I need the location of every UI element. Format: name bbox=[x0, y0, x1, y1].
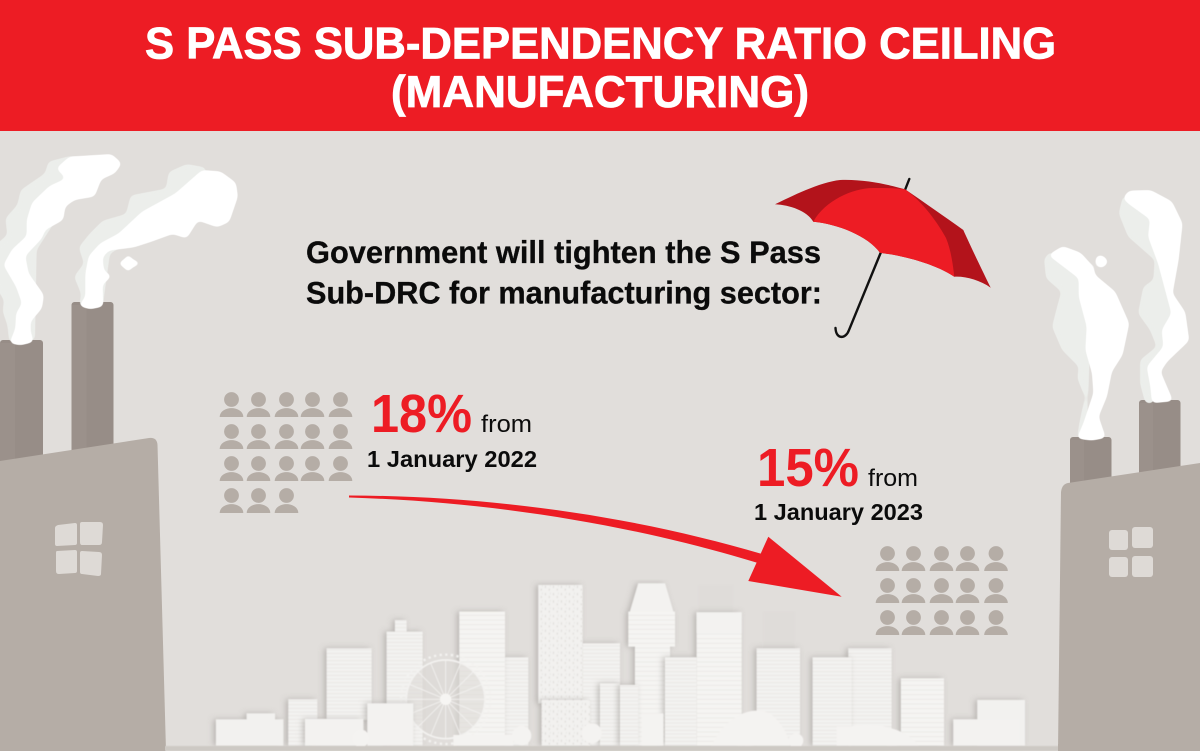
left building bbox=[0, 438, 166, 751]
left windows bbox=[55, 522, 103, 576]
right smoke bbox=[1044, 190, 1189, 441]
umbrella handle bbox=[836, 179, 909, 337]
skyline left half bbox=[216, 585, 620, 747]
trees bbox=[352, 723, 602, 747]
stat 2022: 1 January 2022 bbox=[367, 446, 537, 472]
title: S PASS SUB-DEPENDENCY RATIO CEILING bbox=[145, 20, 1056, 68]
header banner bbox=[0, 0, 1200, 131]
title: (MANUFACTURING) bbox=[391, 68, 809, 117]
stat 2023 bbox=[754, 438, 923, 525]
skyline right half bbox=[620, 583, 1025, 748]
right chimneys bbox=[1070, 400, 1180, 492]
left factory bbox=[0, 154, 238, 751]
umbrella canopy bright bbox=[813, 188, 954, 277]
stat 2023: 1 January 2023 bbox=[754, 499, 923, 525]
trees bbox=[642, 711, 918, 748]
left chimneys bbox=[0, 302, 114, 470]
stat 2022 bbox=[367, 384, 537, 472]
intro text: Government will tighten the S Pass bbox=[306, 234, 821, 270]
ground strip bbox=[0, 746, 1200, 751]
right building bbox=[1058, 463, 1200, 751]
stat 2023: 15% bbox=[757, 438, 859, 498]
stat 2023: from bbox=[868, 465, 918, 492]
umbrella canopy dark bbox=[775, 180, 991, 288]
right factory bbox=[1044, 190, 1200, 751]
redraw building bases over ground bbox=[0, 744, 1200, 751]
arrow bbox=[349, 496, 842, 597]
left smoke bbox=[0, 154, 238, 345]
stat 2022: from bbox=[481, 411, 532, 438]
stat 2022: 18% bbox=[371, 384, 472, 444]
people icons 2023 bbox=[876, 546, 1008, 635]
umbrella bbox=[775, 179, 991, 337]
ferris wheel bbox=[401, 655, 490, 744]
right windows bbox=[1109, 527, 1153, 577]
people icons 2022 bbox=[220, 392, 352, 513]
city skyline bbox=[0, 583, 1200, 751]
intro text: Sub-DRC for manufacturing sector: bbox=[306, 274, 822, 310]
